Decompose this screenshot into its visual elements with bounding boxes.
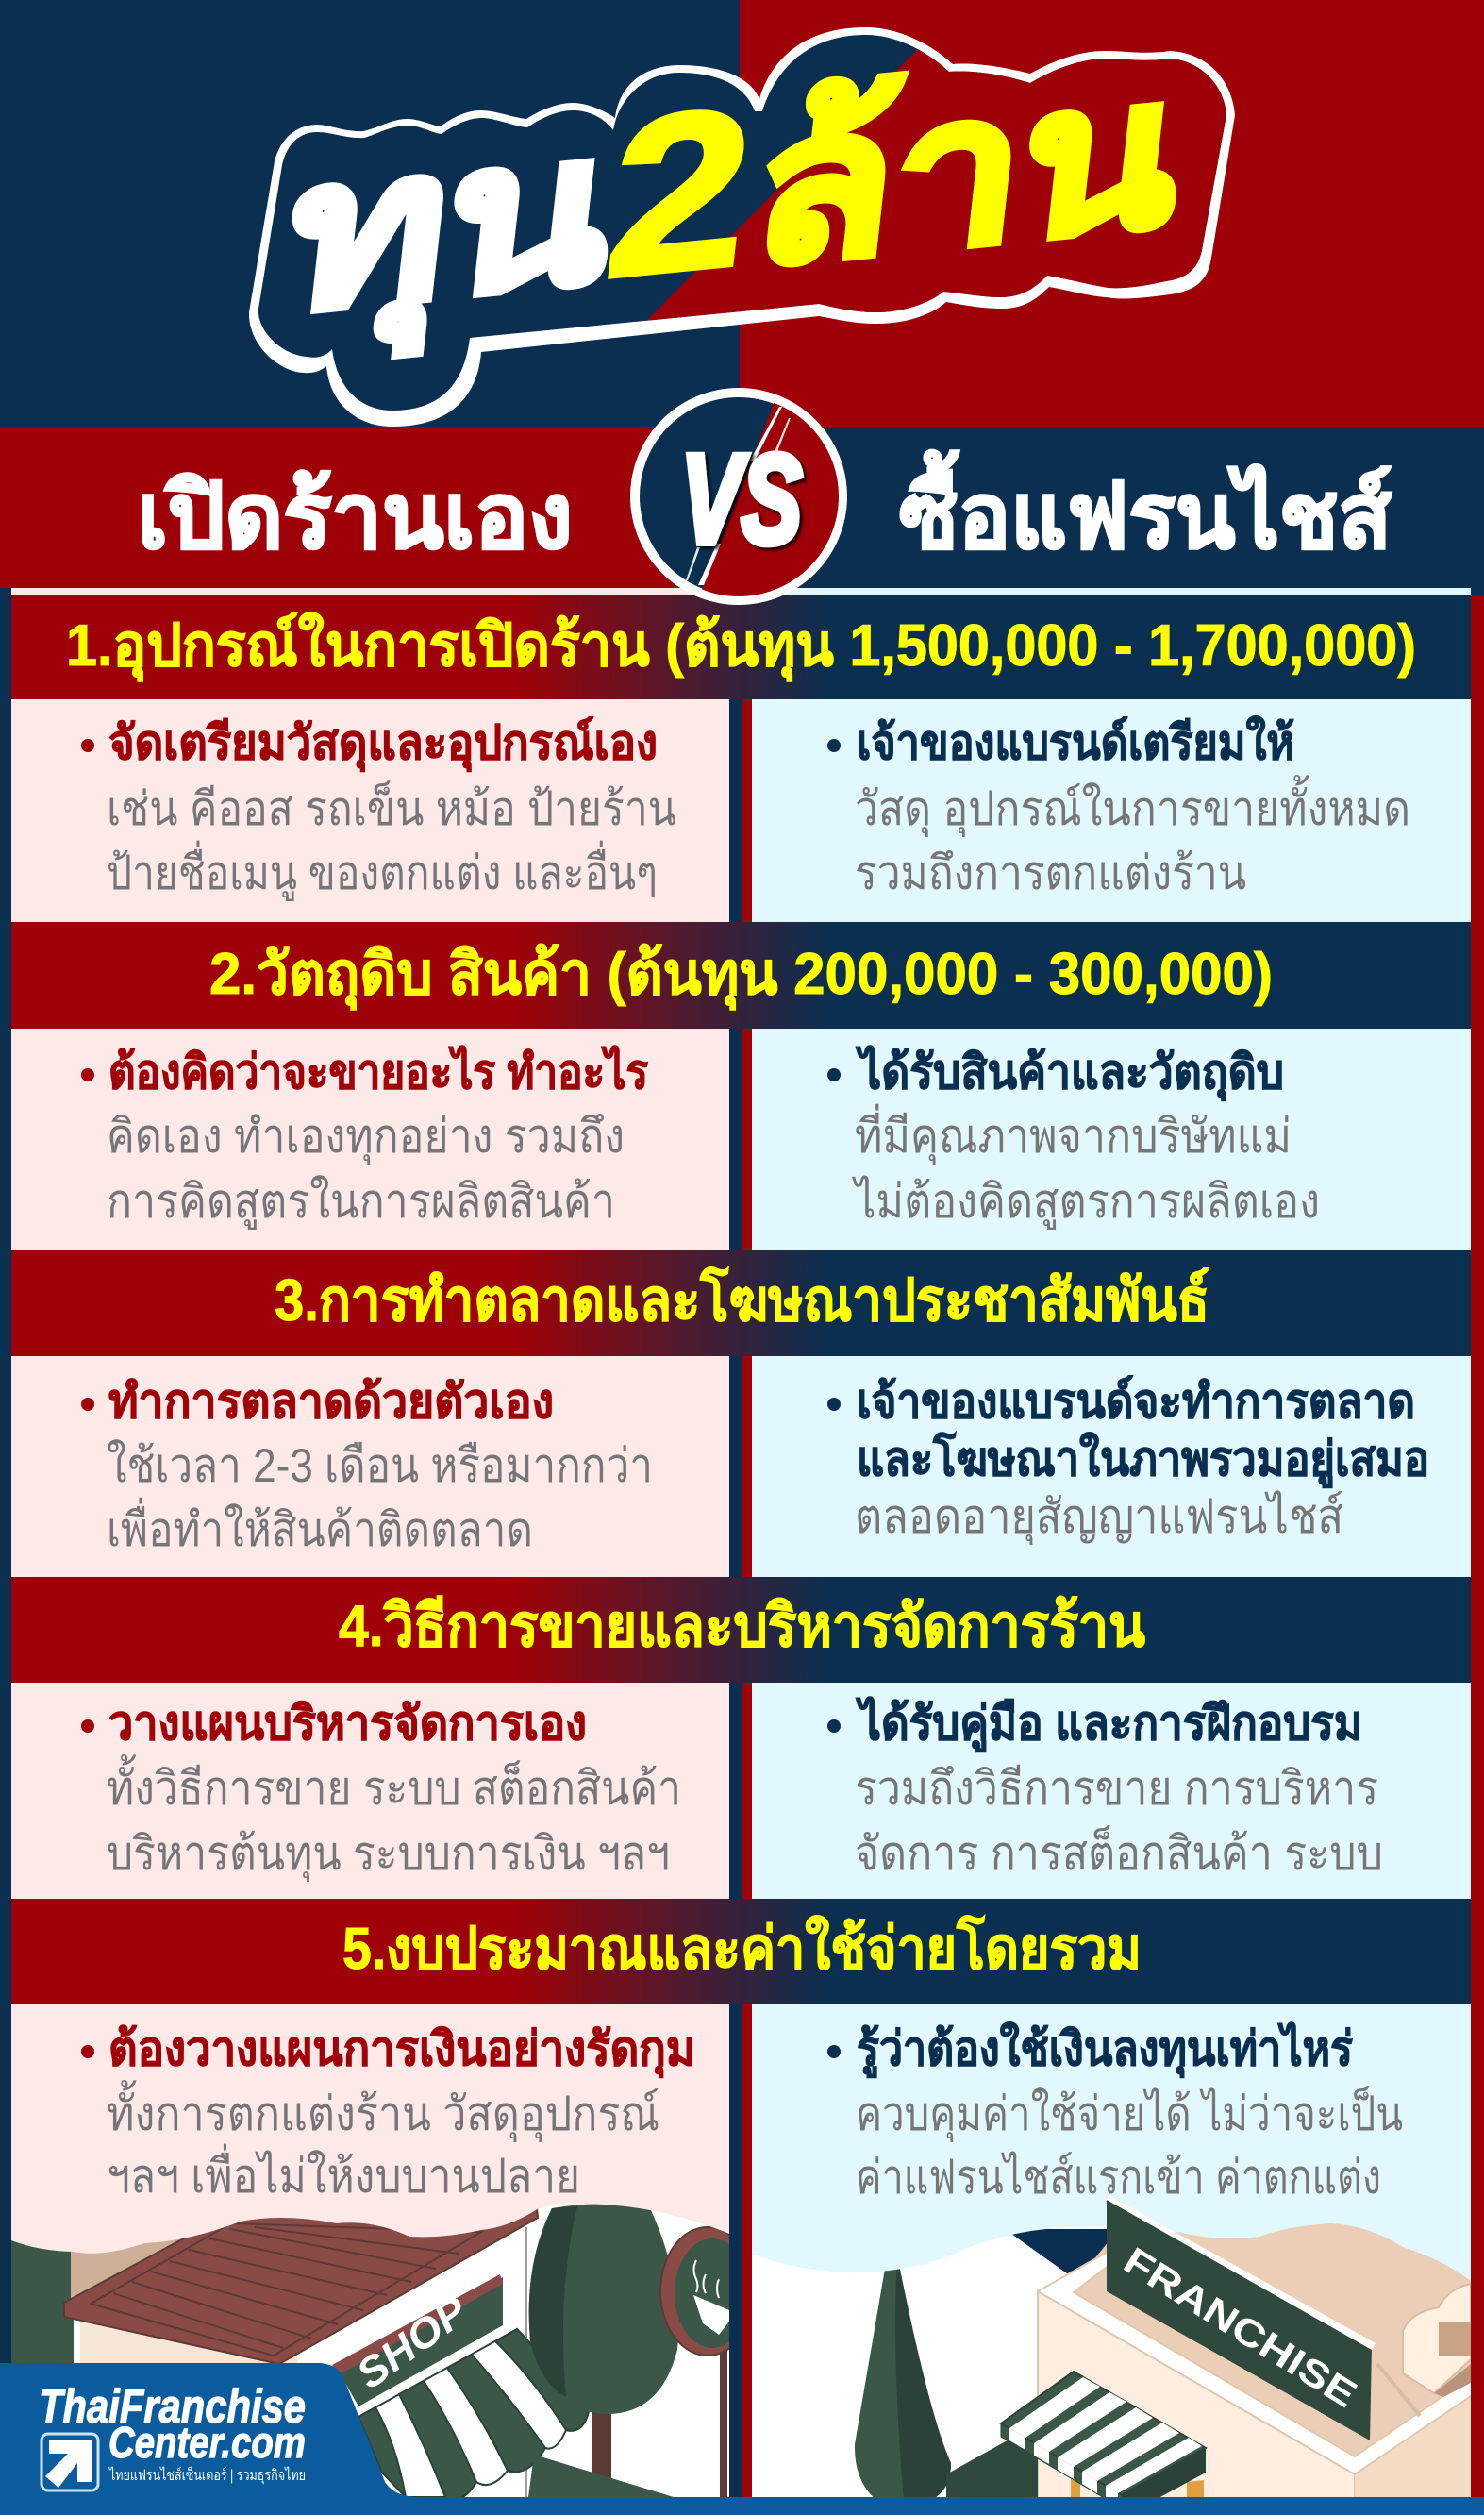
rooftop unit (1377, 2284, 1471, 2416)
logo: ThaiFranchise Center.com: Center.com (108, 2418, 306, 2467)
panel 5 left with shop illustration: ฯลฯ เพื่อไม่ให้งบบานปลาย (107, 2144, 580, 2203)
panel 5 right with franchise illustration: ค่าแฟรนไชส์แรกเข้า ค่าตกแต่ง (856, 2151, 1381, 2204)
panel 5 right with franchise illustration (752, 2004, 1481, 2515)
title text: ล้าน: ล้าน (743, 35, 1192, 308)
panel 3 right: ตลอดอายุสัญญาแฟรนไชส์ (855, 1490, 1343, 1545)
panel 3 left: ทำการตลาดด้วยตัวเอง (108, 1375, 554, 1428)
panel 4 right (752, 1683, 1471, 1899)
title text: 2: 2 (596, 59, 764, 326)
panel 4 right: รวมถึงวิธีการขาย การบริหาร (855, 1762, 1378, 1815)
bottom blue bar (0, 2497, 1484, 2515)
shop sign (332, 2274, 503, 2406)
panel 2 right: ที่มีคุณภาพจากบริษัทแม่ (855, 1104, 1292, 1165)
panel 4 right: ได้รับคู่มือ และการฝึกอบรม (855, 1696, 1362, 1752)
panel 1 right: เจ้าของแบรนด์เตรียมให้ (857, 715, 1294, 769)
panel 4 left (11, 1683, 729, 1899)
shop sign: SHOP (348, 2287, 476, 2398)
title speech blob (249, 27, 1245, 427)
header 3: 3.การทำตลาดและโฆษณาประชาสัมพันธ์ (275, 1266, 1209, 1333)
cypress tree (855, 2255, 951, 2501)
panel 3 left: เพื่อทำให้สินค้าติดตลาด (107, 1498, 533, 1556)
logo: ThaiFranchise Center.com (0, 2363, 420, 2515)
header 1 (11, 595, 1471, 699)
logo: ThaiFranchise Center.com: ไทยแฟรนไชส์เซ็นเตอร์ | รวมธุรกิจไทย (108, 2465, 306, 2485)
panel 1 left (11, 699, 729, 922)
panel 2 left: ต้องคิดว่าจะขายอะไร ทำอะไร (108, 1045, 648, 1098)
band heading right: ซื้อแฟรนไชส์: ซื้อแฟรนไชส์ (899, 449, 1392, 567)
building (1038, 2251, 1476, 2501)
panel 5 right with franchise illustration: รู้ว่าต้องใช้เงินลงทุนเท่าไหร่ (857, 2021, 1353, 2078)
header 4: 4.วิธีการขายและบริหารจัดการร้าน (339, 1594, 1145, 1659)
icon: arrow (42, 2434, 98, 2490)
panel 4 left: ทั้งวิธีการขาย ระบบ สต็อกสินค้า (107, 1754, 681, 1815)
striped awning (1001, 2372, 1206, 2515)
panel 4 left: บริหารต้นทุน ระบบการเงิน ฯลฯ (107, 1827, 670, 1882)
logo: ThaiFranchise Center.com: ThaiFranchise (39, 2380, 306, 2433)
header 5 (11, 1899, 1471, 2004)
panel 1 right (752, 699, 1471, 922)
panel 4 left: วางแผนบริหารจัดการเอง (108, 1697, 587, 1750)
tree (528, 2204, 678, 2497)
panel row 4 (11, 1683, 1471, 1899)
panel 1 right: วัสดุ อุปกรณ์ในการขายทั้งหมด (855, 775, 1410, 837)
header 2 (11, 922, 1471, 1029)
header 5: 5.งบประมาณและค่าใช้จ่ายโดยรวม (342, 1914, 1142, 1982)
panel 2 left: การคิดสูตรในการผลิตสินค้า (107, 1175, 615, 1230)
title text: ทุน: ทุน (276, 92, 624, 367)
panel 2 right (752, 1029, 1471, 1250)
pink wave top (11, 2004, 729, 2254)
panel 1 left: เช่น คีออส รถเข็น หม้อ ป้ายร้าน (107, 780, 676, 835)
panel row 2 (11, 1029, 1471, 1250)
panel 2 left (11, 1029, 729, 1250)
panel 5 left with shop illustration: ทั้งการตกแต่งร้าน วัสดุอุปกรณ์ (107, 2080, 659, 2142)
ground (946, 2440, 1038, 2497)
panel row 3 (11, 1356, 1471, 1577)
panel 2 right: ได้รับสินค้าและวัตถุดิบ (855, 1045, 1284, 1101)
band heading left: เปิดร้านเอง: เปิดร้านเอง (137, 466, 573, 567)
blue wave top (752, 2004, 1471, 2281)
panel 5 left with shop illustration (11, 2004, 755, 2499)
panel 4 right: จัดการ การสต็อกสินค้า ระบบ (855, 1825, 1383, 1880)
panel 3 left: ใช้เวลา 2-3 เดือน หรือมากกว่า (107, 1439, 653, 1492)
header 2: 2.วัตถุดิบ สินค้า (ต้นทุน 200,000 - 300,000) (209, 942, 1273, 1010)
franchise illustration (855, 2223, 1471, 2497)
panel 1 left: จัดเตรียมวัสดุและอุปกรณ์เอง (108, 716, 658, 772)
panel 5 left with shop illustration: ต้องวางแผนการเงินอย่างรัดกุม (108, 2022, 695, 2078)
VS text: VS (681, 429, 802, 570)
shop illustration (11, 2204, 755, 2499)
panel 3 right: และโฆษณาในภาพรวมอยู่เสมอ (857, 1431, 1429, 1488)
franchise sign (1107, 2195, 1376, 2440)
panel 3 right (752, 1356, 1471, 1577)
roof (64, 2208, 538, 2364)
header 4 (11, 1577, 1471, 1683)
header 1: 1.อุปกรณ์ในการเปิดร้าน (ต้นทุน 1,500,000 - 1,700,000) (66, 612, 1416, 681)
coffee sign (659, 2226, 729, 2497)
title: ทุน 2 ล้าน (249, 27, 1245, 427)
panel row 1 (11, 699, 1471, 922)
VS badge (630, 388, 849, 605)
panel 2 left: คิดเอง ทำเองทุกอย่าง รวมถึง (107, 1110, 625, 1165)
header 3 (11, 1250, 1471, 1356)
panel 2 right: ไม่ต้องคิดสูตรการผลิตเอง (851, 1175, 1320, 1230)
panel 1 left: ป้ายชื่อเมนู ของตกแต่ง และอื่นๆ (107, 841, 658, 901)
striped awning (358, 2329, 590, 2499)
franchise sign: FRANCHISE (1116, 2239, 1364, 2416)
door frame (1071, 2478, 1080, 2497)
panel 1 right: รวมถึงการตกแต่งร้าน (855, 847, 1246, 899)
panel 3 left (11, 1356, 729, 1577)
panel 3 right: เจ้าของแบรนด์จะทำการตลาด (857, 1375, 1415, 1428)
